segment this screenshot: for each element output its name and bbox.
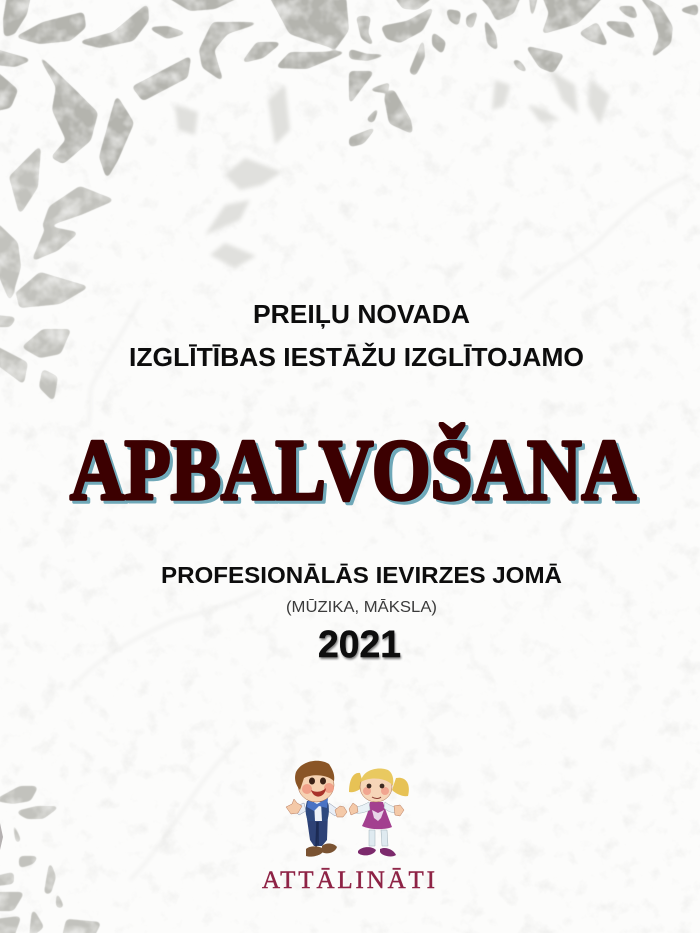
illustration: boy and girl	[286, 761, 409, 857]
floral ornament: bottom left dark bud	[0, 823, 3, 850]
floral ornament: bottom left	[0, 787, 100, 933]
floral ornament: left side	[0, 147, 113, 400]
heading: organiser lines: IZGLĪTĪBAS IESTĀŽU IZGLĪTOJAMO	[129, 342, 584, 372]
floral ornament: top left	[0, 0, 348, 177]
girl	[349, 768, 409, 856]
floral ornament: top right	[350, 0, 697, 146]
heading: organiser lines	[129, 301, 584, 372]
heading: organiser lines: PREIĻU NOVADA	[253, 301, 470, 329]
year: 2021	[319, 626, 402, 668]
caption: ATTĀLINĀTI	[262, 867, 435, 894]
subtitle: field: PROFESIONĀLĀS IEVIRZES JOMĀ	[161, 562, 562, 588]
subtitle: disciplines: (MŪZIKA, MĀKSLA)	[286, 599, 437, 616]
floral ornament: faint central leaves	[175, 70, 610, 268]
boy	[286, 761, 347, 857]
year: 2021	[318, 624, 401, 666]
